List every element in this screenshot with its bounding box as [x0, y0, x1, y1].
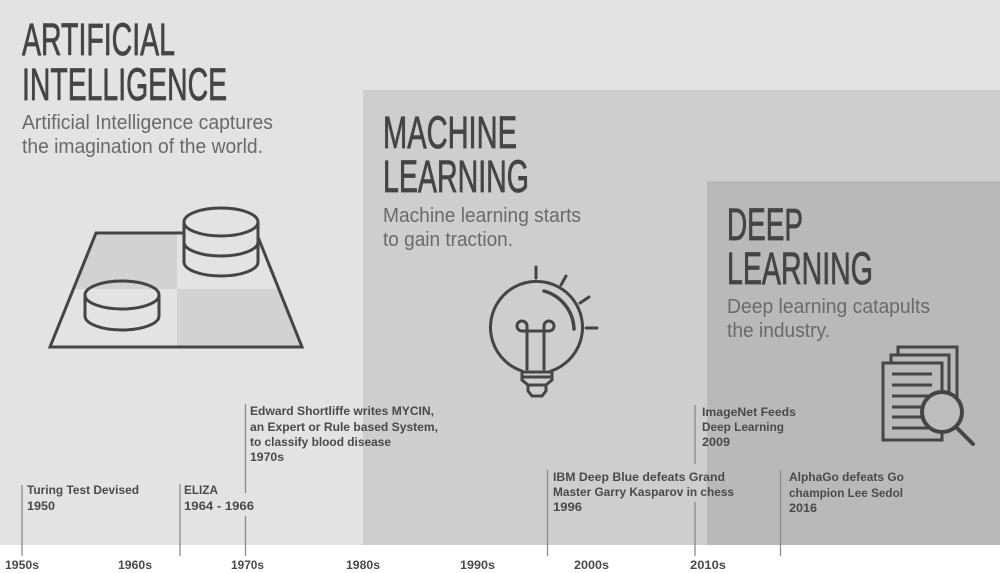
text: machine learning description: to gain traction. — [383, 229, 513, 251]
heading: artificial intelligence: INTELLIGENCE — [22, 59, 227, 110]
event: MYCIN: Edward Shortliffe writes MYCIN, — [250, 404, 434, 418]
event: ImageNet: 2009 — [702, 435, 730, 449]
timeline marker lines — [22, 404, 780, 556]
heading: artificial intelligence: ARTIFICIAL — [22, 14, 175, 65]
event: AlphaGo — [789, 470, 904, 515]
timeline decade labels: 2010s — [690, 558, 726, 572]
event: ELIZA: ELIZA — [184, 483, 218, 497]
rays — [536, 267, 597, 328]
front page — [883, 363, 942, 440]
event: Turing Test — [27, 483, 139, 513]
text: artificial intelligence description: the imagination of the world. — [22, 136, 263, 158]
timeline decade labels: 2000s — [574, 558, 609, 572]
filament — [517, 321, 554, 369]
event: AlphaGo: champion Lee Sedol — [789, 486, 903, 500]
timeline decade labels: 1970s — [231, 558, 264, 572]
back pages — [891, 347, 957, 400]
icon: checkers board with pieces — [50, 208, 302, 347]
timeline decade labels: 1980s — [346, 558, 380, 572]
text: machine learning description: Machine learning starts — [383, 205, 581, 227]
event: ImageNet: Deep Learning — [702, 420, 784, 434]
timeline decade labels: 1960s — [118, 558, 152, 572]
event: Deep Blue: Master Garry Kasparov in chess — [553, 485, 734, 499]
board outline — [50, 233, 302, 347]
text: deep learning description: the industry. — [727, 320, 830, 342]
event: ELIZA: 1964 - 1966 — [184, 499, 254, 513]
text lines — [892, 374, 932, 428]
event: AlphaGo: AlphaGo defeats Go — [789, 470, 904, 484]
event: MYCIN: 1970s — [250, 450, 284, 464]
bulb glass — [491, 281, 582, 371]
event: Turing Test: Turing Test Devised — [27, 483, 139, 497]
text: deep learning description — [727, 296, 930, 342]
heading: deep learning: DEEP — [727, 199, 803, 250]
bulb base — [522, 372, 552, 396]
event: ELIZA — [184, 483, 254, 513]
event: ImageNet — [702, 405, 796, 449]
heading: artificial intelligence — [22, 14, 227, 110]
heading: machine learning: MACHINE — [383, 107, 517, 158]
board dark square upper left — [73, 233, 177, 289]
panel: deep learning background — [707, 181, 1000, 545]
board dark square lower right — [177, 289, 302, 347]
timeline decade labels: 1990s — [460, 558, 495, 572]
heading: deep learning — [727, 199, 873, 294]
event: MYCIN: to classify blood disease — [250, 435, 391, 449]
heading: machine learning: LEARNING — [383, 151, 529, 202]
heading: deep learning: LEARNING — [727, 243, 873, 294]
event: ImageNet: ImageNet Feeds — [702, 405, 796, 419]
magnifier — [922, 392, 973, 444]
panel: machine learning background — [363, 90, 1000, 545]
text: artificial intelligence description: Artificial Intelligence captures — [22, 112, 273, 134]
event: Deep Blue — [553, 470, 734, 514]
text: machine learning description — [383, 205, 581, 251]
icon: light bulb — [491, 267, 597, 396]
icon: documents with magnifier — [883, 347, 973, 444]
text: artificial intelligence description — [22, 112, 273, 158]
event: Turing Test: 1950 — [27, 499, 55, 513]
event: MYCIN — [250, 404, 438, 464]
timeline decade labels — [5, 558, 726, 572]
event: MYCIN: an Expert or Rule based System, — [250, 420, 438, 434]
event: AlphaGo: 2016 — [789, 501, 817, 515]
timeline decade labels: 1950s — [5, 558, 39, 572]
text: deep learning description: Deep learning catapults — [727, 296, 930, 318]
upper stack of pieces — [184, 208, 258, 276]
lower piece — [85, 281, 159, 330]
event: Deep Blue: 1996 — [553, 500, 582, 514]
event: Deep Blue: IBM Deep Blue defeats Grand — [553, 470, 725, 484]
heading: machine learning — [383, 107, 529, 202]
glass highlight — [544, 291, 574, 329]
